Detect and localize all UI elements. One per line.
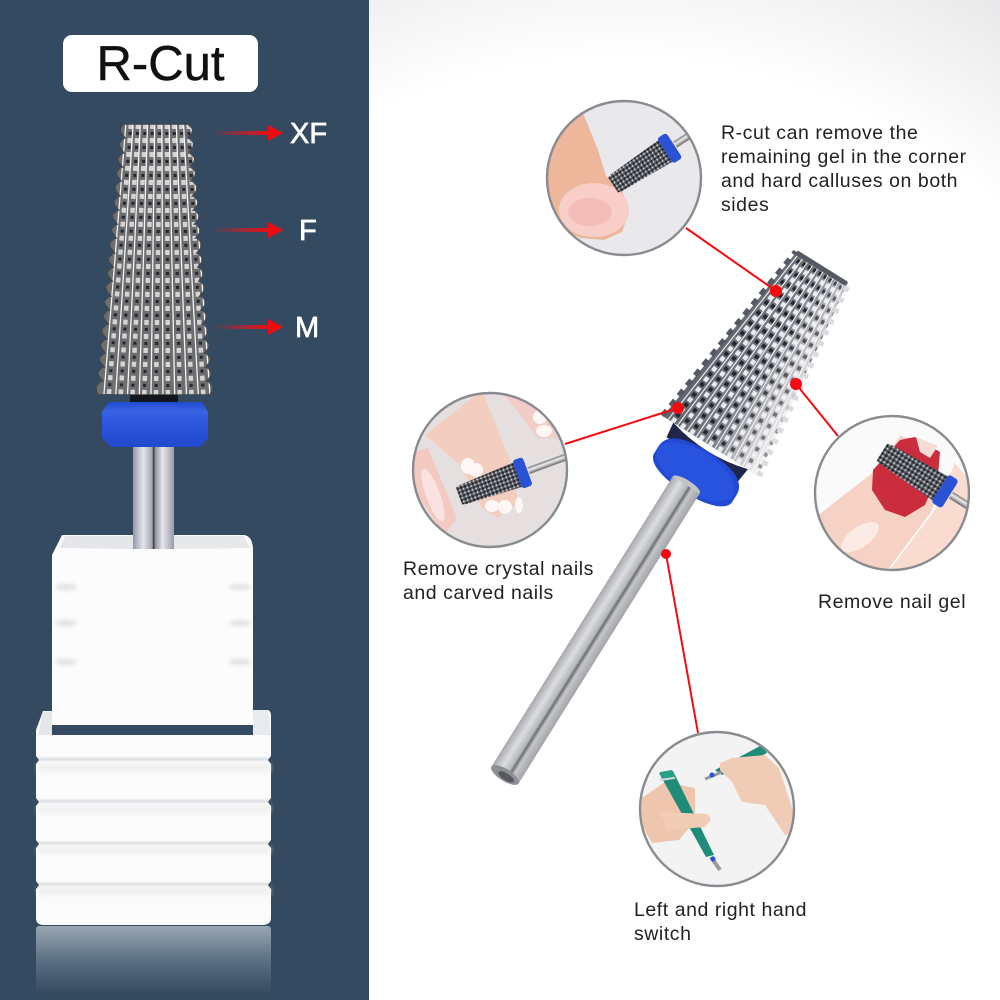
circle photo: left and right hand use [637, 729, 800, 889]
callout connectors [565, 228, 838, 733]
cutting head [96, 124, 215, 404]
blue collar [102, 402, 208, 447]
right panel background [369, 0, 1000, 1000]
caption: bottom: switch [634, 923, 691, 945]
angled bit blue collar [645, 428, 748, 516]
title badge: R-Cut: R-Cut [97, 37, 225, 91]
label: M: M [295, 312, 319, 344]
angled bit shank [488, 472, 702, 789]
label: XF: XF [290, 118, 327, 150]
caption: left: and carved nails [403, 582, 554, 604]
arrow: XF [213, 125, 283, 141]
connector: top circle [686, 228, 782, 297]
angled drill bit product [491, 250, 850, 785]
connector: left circle [565, 402, 684, 444]
arrow: M [213, 319, 283, 335]
caption: top: R-cut can remove the [721, 122, 918, 144]
connector: right circle [790, 378, 838, 436]
caption: top: sides [721, 194, 769, 216]
holder ridged base [36, 710, 271, 925]
caption: left: Remove crystal nails [403, 558, 594, 580]
circle photo: removing nail gel [814, 414, 970, 572]
white ceramic holder [36, 535, 271, 994]
angled bit cutting head [660, 250, 850, 482]
circle photo: crystal nails [412, 392, 568, 548]
title badge: R-Cut [63, 35, 258, 92]
caption: top: remaining gel in the corner [721, 146, 967, 168]
grit arrows and labels [213, 118, 327, 344]
arrow: F [213, 222, 283, 238]
holder upper block [52, 535, 253, 725]
caption: bottom: Left and right hand [634, 899, 807, 921]
caption: right: Remove nail gel [818, 591, 966, 613]
upright drill bit product [96, 124, 215, 551]
left panel background [0, 0, 369, 1000]
shank [133, 445, 174, 551]
caption: top: and hard calluses on both [721, 170, 958, 192]
label: F: F [299, 215, 317, 247]
holder reflection [36, 926, 271, 994]
circle photo: bit on thumb corner [546, 100, 702, 256]
connector: bottom circle [661, 549, 698, 733]
